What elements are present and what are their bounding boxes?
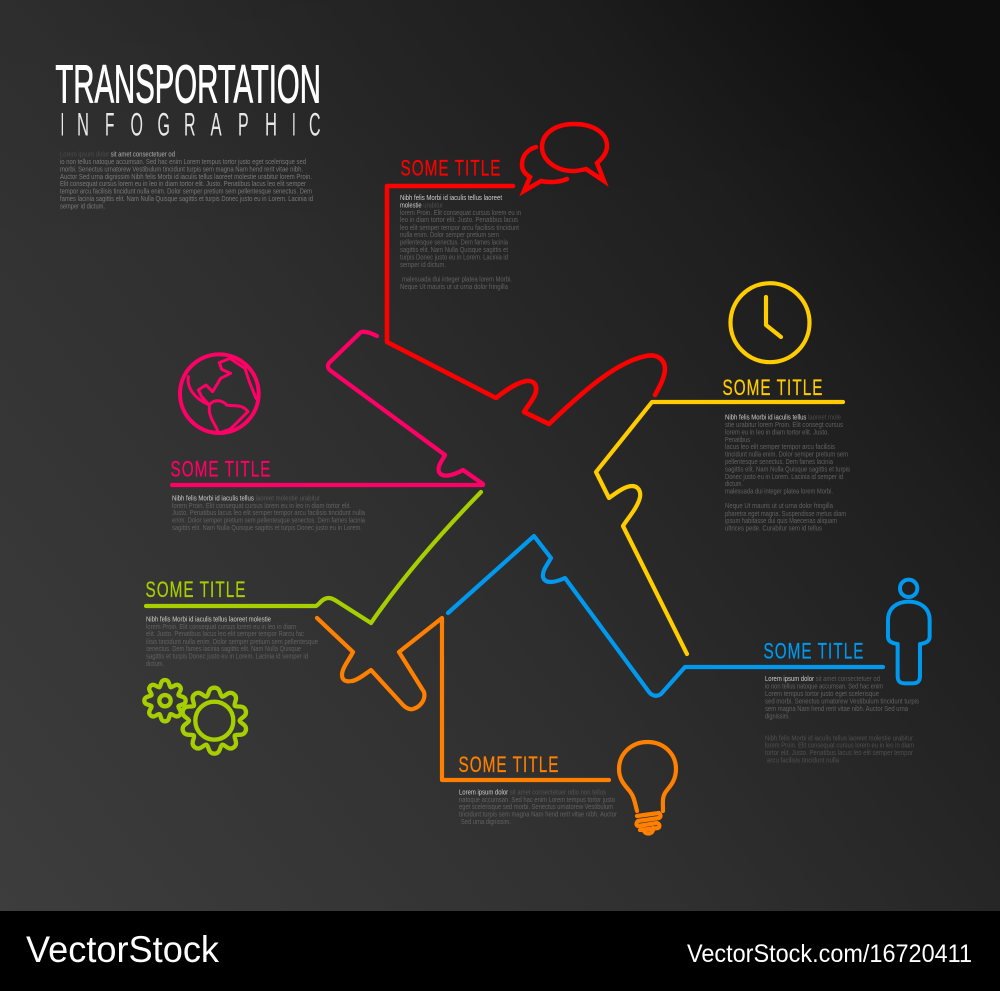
text block: green: senectus. Dem fames lacinia sagittis elit. Nam Nulla Quisque: [146, 644, 301, 653]
text block: blue: tortor elit. Justo. Penatibus lacus leo elit semper tempor: [765, 748, 913, 757]
intro text: Auctor Sed urna dignissim Nibh felis Morbi id iaculis tellus laoreet molestie urabitur lorem Proin.: [60, 172, 312, 181]
footer brand: VectorStock: [26, 929, 219, 970]
text block: blue: [765, 674, 919, 765]
text block: yellow: Donec justo eu in Lorem. Lacinia id semper id: [725, 472, 843, 481]
panel: orange title: SOME TITLE: [458, 753, 558, 778]
icon: globe: [180, 354, 259, 433]
text block: yellow: Penatibus: [725, 435, 750, 444]
text block: yellow: tincidunt nulla enim. Dolor semper pretium sem: [725, 450, 848, 458]
panel: yellow title: SOME TITLE: [722, 376, 822, 401]
intro text: morbi. Senectus urnatorew Vestibulum tincidunt turpis sem magna Nam hend rerit vitae nibh.: [60, 164, 303, 174]
text block: green: ilisis tincidunt nulla enim. Dolor semper pretium sem pellentesque: [146, 637, 318, 646]
text block: green: dictum.: [146, 659, 164, 668]
intro text: tempor arcu facilisis tincidunt nulla enim. Dolor semper pretium sem pellentesque senectus. Dem: [60, 186, 312, 196]
text block: red: sagittis elit. Nam Nulla Quisque sagittis et: [400, 245, 508, 254]
subtitle: F: [105, 107, 114, 143]
text block: yellow: stie urabitur lorem Proin. Elit consegt cursus: [725, 420, 843, 429]
intro text: Lorem ipsum dolor sit amet consectetuer od: [60, 150, 175, 158]
text block: yellow: pharetra eget magna. Suspendisse metus diam: [725, 509, 846, 518]
text block: blue: Lorem tempus tortor justo eget scelerisque: [765, 689, 879, 698]
text block: green: [146, 614, 318, 668]
text block: red: Nibh felis Morbi id iaculis tellus laoreet: [400, 193, 502, 202]
text block: red: leo in diam tortor elit. Justo. Penatibus lacus: [400, 215, 518, 224]
subtitle: G: [158, 108, 170, 143]
icon: light bulb: [619, 742, 676, 834]
panel: green title: SOME TITLE: [146, 578, 245, 603]
text block: yellow: lorem eu in leo in diam tortor elit. Justo.: [725, 428, 829, 436]
subtitle: [60, 107, 321, 143]
icon: speech bubbles: [522, 124, 607, 191]
text block: red: nulla enim. Dolor semper pretium sem: [400, 230, 499, 239]
text block: yellow: ultrices pede. Curabitur sem id tellus: [725, 524, 822, 532]
text block: blue: lorem Proin. Elit consequat cursus lorem eu in leo in diam: [765, 741, 914, 750]
intro text: fames lacinia sagittis elit. Nam Nulla Quisque sagittis et turpis Donec justo eu in Lorem. Lacinia id: [60, 194, 313, 203]
panel: pink title: SOME TITLE: [170, 458, 270, 482]
icon: person: [888, 580, 930, 683]
text block: blue: dignissim.: [765, 711, 790, 720]
text block: orange: [459, 788, 617, 826]
text block: red: [400, 193, 521, 291]
text block: blue: arcu facilisis tincidunt nulla: [767, 756, 839, 765]
title: [55, 54, 321, 143]
text block: yellow: malesuada dui integer platea lorem Morbi.: [725, 486, 833, 496]
subtitle: P: [238, 108, 249, 143]
subtitle: A: [210, 108, 222, 143]
text block: pink: enim. Dolor semper pretium sem pellentesque senectus. Dem fames lacinia: [172, 516, 365, 524]
subtitle: I: [60, 108, 64, 143]
text block: yellow: sagittis elit. Nam Nulla Quisque sagittis et turpis: [725, 464, 850, 474]
text block: yellow: Neque Ut mauris ut ut urna dolor fringilla: [725, 501, 833, 510]
subtitle: C: [309, 108, 321, 143]
intro text: io non tellus natoque accumsan. Sed hac enim Lorem tempus tortor justo eget scelerisque sed: [60, 157, 306, 166]
pink line: left wing: [172, 332, 483, 485]
text block: yellow: [725, 412, 850, 532]
icon: clock: [730, 283, 810, 362]
text block: red: turpis Donec justo eu in Lorem. Lacinia id: [400, 252, 508, 262]
text block: green: lorem Proin. Elit consequat cursus lorem eu in leo in diam: [146, 622, 296, 631]
text block: blue: sed morbi. Senectus urnatorew Vestibulum tincidunt turpis: [765, 696, 919, 705]
text block: green: sagittis et turpis Donec justo eu in Lorem. Lacinia id semper id: [146, 652, 308, 660]
text block: pink: sagittis elit. Nam Nulla Quisque sagittis et turpis Donec justo eu in Lorem.: [172, 523, 362, 532]
text block: red: molestie urabitur: [400, 200, 443, 210]
text block: red: malesuada dui integer platea lorem Morbi.: [402, 274, 512, 284]
text block: red: lorem Proin. Elit consequat cursus lorem eu in: [400, 208, 521, 217]
subtitle: I: [292, 108, 296, 143]
footer bar: [0, 911, 1000, 991]
text block: red: semper id dictum.: [400, 260, 446, 269]
green line: fuselage rear: [146, 492, 481, 623]
intro text: Elit consequat cursus lorem eu in leo in diam tortor elit. Justo. Penatibus lacus leo elit semper: [60, 179, 306, 188]
text block: yellow: pellentesque senectus. Dem fames lacinia: [725, 457, 833, 466]
text block: yellow: Nibh felis Morbi id iaculis tellus laoreet mole: [725, 412, 841, 422]
text block: pink: lorem Proin. Elit consequat cursus lorem eu in leo in diam tortor elit.: [172, 501, 351, 510]
text block: orange: tincidunt turpis sem magna Nam hend rerit vitae nibh. Auctor: [459, 810, 617, 818]
blue line: fuselage underside: [448, 536, 883, 696]
text block: blue: Nibh felis Morbi id iaculis tellus laoreet molestie urabitur: [765, 733, 914, 742]
intro text: semper id dictum.: [60, 202, 105, 210]
title: TRANSPORTATION: [55, 54, 321, 114]
text block: red: leo elit semper tempor arcu facilisis tincidunt: [400, 223, 519, 232]
footer url: VectorStock.com/16720411: [687, 940, 972, 968]
panel: blue title: SOME TITLE: [764, 640, 863, 664]
subtitle: H: [265, 108, 277, 143]
red line: plane nose section: [387, 186, 665, 424]
text block: yellow: lacus leo elit semper tempor arcu facilisis: [725, 442, 835, 451]
text block: orange: Sed urna dignissim.: [461, 817, 511, 826]
panel: red title: SOME TITLE: [400, 157, 500, 181]
text block: pink: [172, 494, 365, 532]
icon: gears: [144, 680, 248, 754]
text block: green: elit. Justo. Penatibus lacus leo elit semper tempor Rarcu fac: [146, 629, 304, 638]
intro text: [60, 150, 313, 210]
text block: orange: natoque accumsan. Sed hac enim Lorem tempus tortor justo: [459, 795, 615, 804]
text block: orange: eget scelerisque sed morbi. Senectus urnatorew Vestibulum: [459, 802, 613, 811]
text block: blue: sem magna Nam hend rerit vitae nibh. Auctor Sed urna: [765, 704, 908, 713]
orange line: tail: [317, 618, 609, 780]
text block: pink: Justo. Penatibus lacus leo elit semper tempor arcu facilisis tincidunt nulla: [172, 508, 365, 517]
subtitle: N: [77, 108, 89, 143]
subtitle: R: [184, 108, 196, 143]
yellow line: right wing: [596, 402, 843, 654]
text block: red: Neque Ut mauris ut ut urna dolor fringilla: [400, 282, 508, 291]
text block: green: Nibh felis Morbi id iaculis tellus laoreet molestie: [146, 614, 271, 624]
text block: red: pellentesque senectus. Dem fames lacinia: [400, 238, 508, 246]
subtitle: O: [130, 108, 143, 143]
text block: yellow: dictum.: [725, 479, 743, 488]
text block: yellow: ipsum habitasse dui quis Maecenas aliquam: [725, 516, 837, 525]
text block: pink: Nibh felis Morbi id iaculis tellus laoreet molestie urabitur: [172, 494, 321, 502]
text block: orange: Lorem ipsum dolor sit amet consectetuer odio non tellus: [459, 788, 606, 796]
text block: blue: Lorem ipsum dolor sit amet consectetuer od: [765, 674, 880, 683]
text block: blue: io non tellus natoque accumsan. Sed hac enim: [765, 682, 883, 691]
